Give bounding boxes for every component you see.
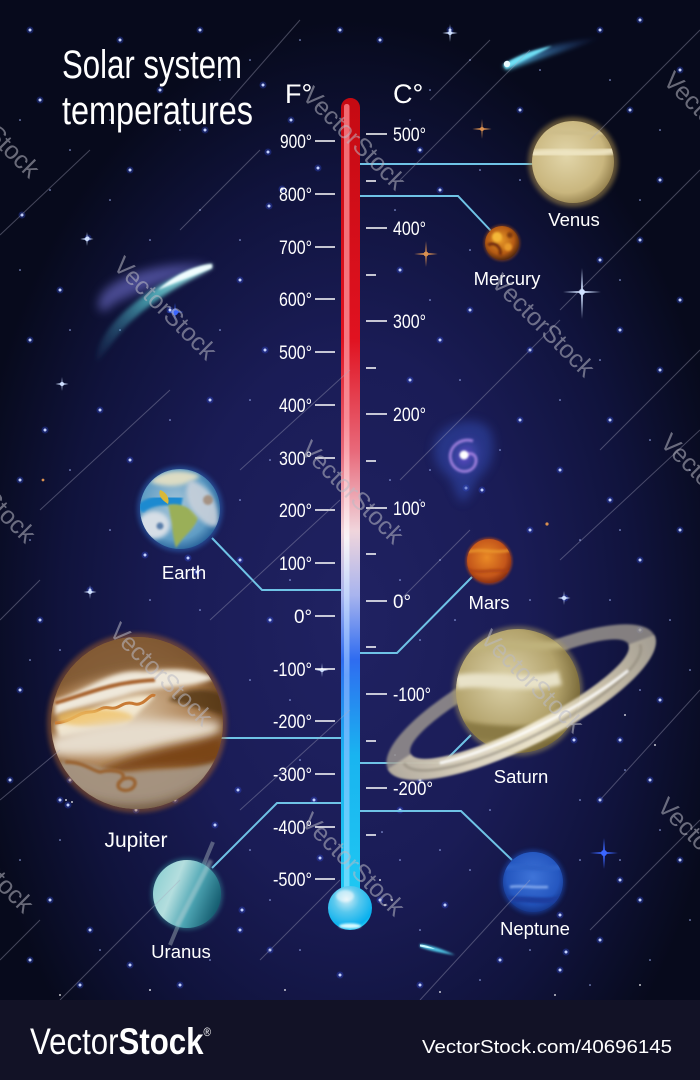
comet: upper left bbox=[97, 264, 212, 362]
comet: upper right bbox=[503, 37, 602, 70]
planet: Jupiter bbox=[47, 630, 227, 815]
watermarks: VectorStock bbox=[296, 807, 410, 922]
Fahrenheit scale: -100° bbox=[273, 659, 312, 681]
watermarks: VectorStock bbox=[104, 617, 218, 732]
watermarks: VectorStock bbox=[108, 251, 222, 366]
planet labels: Uranus bbox=[151, 941, 211, 962]
Fahrenheit scale: -200° bbox=[273, 711, 312, 733]
planet labels: Neptune bbox=[500, 918, 570, 939]
title: temperatures bbox=[62, 89, 253, 133]
connector lines bbox=[212, 164, 535, 868]
Celsius scale: 100° bbox=[393, 498, 426, 520]
Fahrenheit heading: F° bbox=[285, 79, 312, 109]
footer logo: ® bbox=[204, 1025, 211, 1039]
planet: Neptune bbox=[501, 850, 565, 914]
title bbox=[62, 43, 253, 133]
planet labels bbox=[104, 209, 600, 962]
planet labels: Earth bbox=[162, 562, 206, 583]
Fahrenheit scale: -400° bbox=[273, 817, 312, 839]
footer band bbox=[0, 1000, 700, 1080]
footer logo: VectorStock bbox=[30, 1021, 219, 1062]
Fahrenheit scale: 200° bbox=[279, 500, 312, 522]
planet: Earth bbox=[137, 466, 223, 552]
Fahrenheit scale: -500° bbox=[273, 869, 312, 891]
Fahrenheit scale: 500° bbox=[279, 342, 312, 364]
watermarks: VectorStock bbox=[486, 268, 600, 383]
Fahrenheit scale: 800° bbox=[279, 184, 312, 206]
comet: lower bbox=[420, 944, 455, 955]
footer image id: VectorStock.com/40696145 bbox=[422, 1036, 672, 1057]
Fahrenheit scale: 300° bbox=[279, 448, 312, 470]
Fahrenheit scale: 100° bbox=[279, 553, 312, 575]
planet: Saturn bbox=[385, 622, 658, 782]
planet: Mars bbox=[466, 538, 512, 584]
Celsius scale: 0° bbox=[393, 591, 411, 613]
Fahrenheit scale: 900° bbox=[280, 131, 312, 153]
planet: Venus bbox=[528, 117, 618, 207]
planet: Uranus bbox=[151, 842, 223, 945]
planet labels: Mercury bbox=[474, 268, 541, 289]
Celsius scale: -200° bbox=[393, 778, 433, 800]
planet labels: Saturn bbox=[494, 766, 548, 787]
title: Solar system bbox=[62, 43, 242, 87]
Fahrenheit scale: -300° bbox=[273, 764, 312, 786]
Fahrenheit scale: 0° bbox=[294, 606, 312, 628]
Celsius scale: -100° bbox=[393, 684, 431, 706]
Celsius scale bbox=[366, 124, 433, 835]
Fahrenheit scale: 600° bbox=[279, 289, 312, 311]
watermarks: VectorStock bbox=[295, 435, 409, 550]
bright stars bbox=[42, 24, 618, 869]
Fahrenheit scale: 700° bbox=[279, 237, 312, 259]
planet: Mercury bbox=[484, 224, 520, 262]
Fahrenheit scale: 400° bbox=[279, 395, 312, 417]
Celsius scale: 300° bbox=[393, 311, 426, 333]
Fahrenheit scale bbox=[273, 131, 335, 891]
thermometer bbox=[328, 98, 372, 930]
Celsius heading: C° bbox=[393, 79, 423, 109]
Celsius scale: 200° bbox=[393, 404, 426, 426]
Celsius scale: 500° bbox=[393, 124, 426, 146]
planet labels: Mars bbox=[468, 592, 510, 613]
watermarks: VectorStock bbox=[297, 81, 411, 196]
watermarks: VectorStock bbox=[475, 624, 589, 739]
galaxy bbox=[434, 421, 495, 502]
planet labels: Venus bbox=[548, 209, 600, 230]
planet labels: Jupiter bbox=[104, 829, 168, 852]
Celsius scale: 400° bbox=[393, 218, 426, 240]
